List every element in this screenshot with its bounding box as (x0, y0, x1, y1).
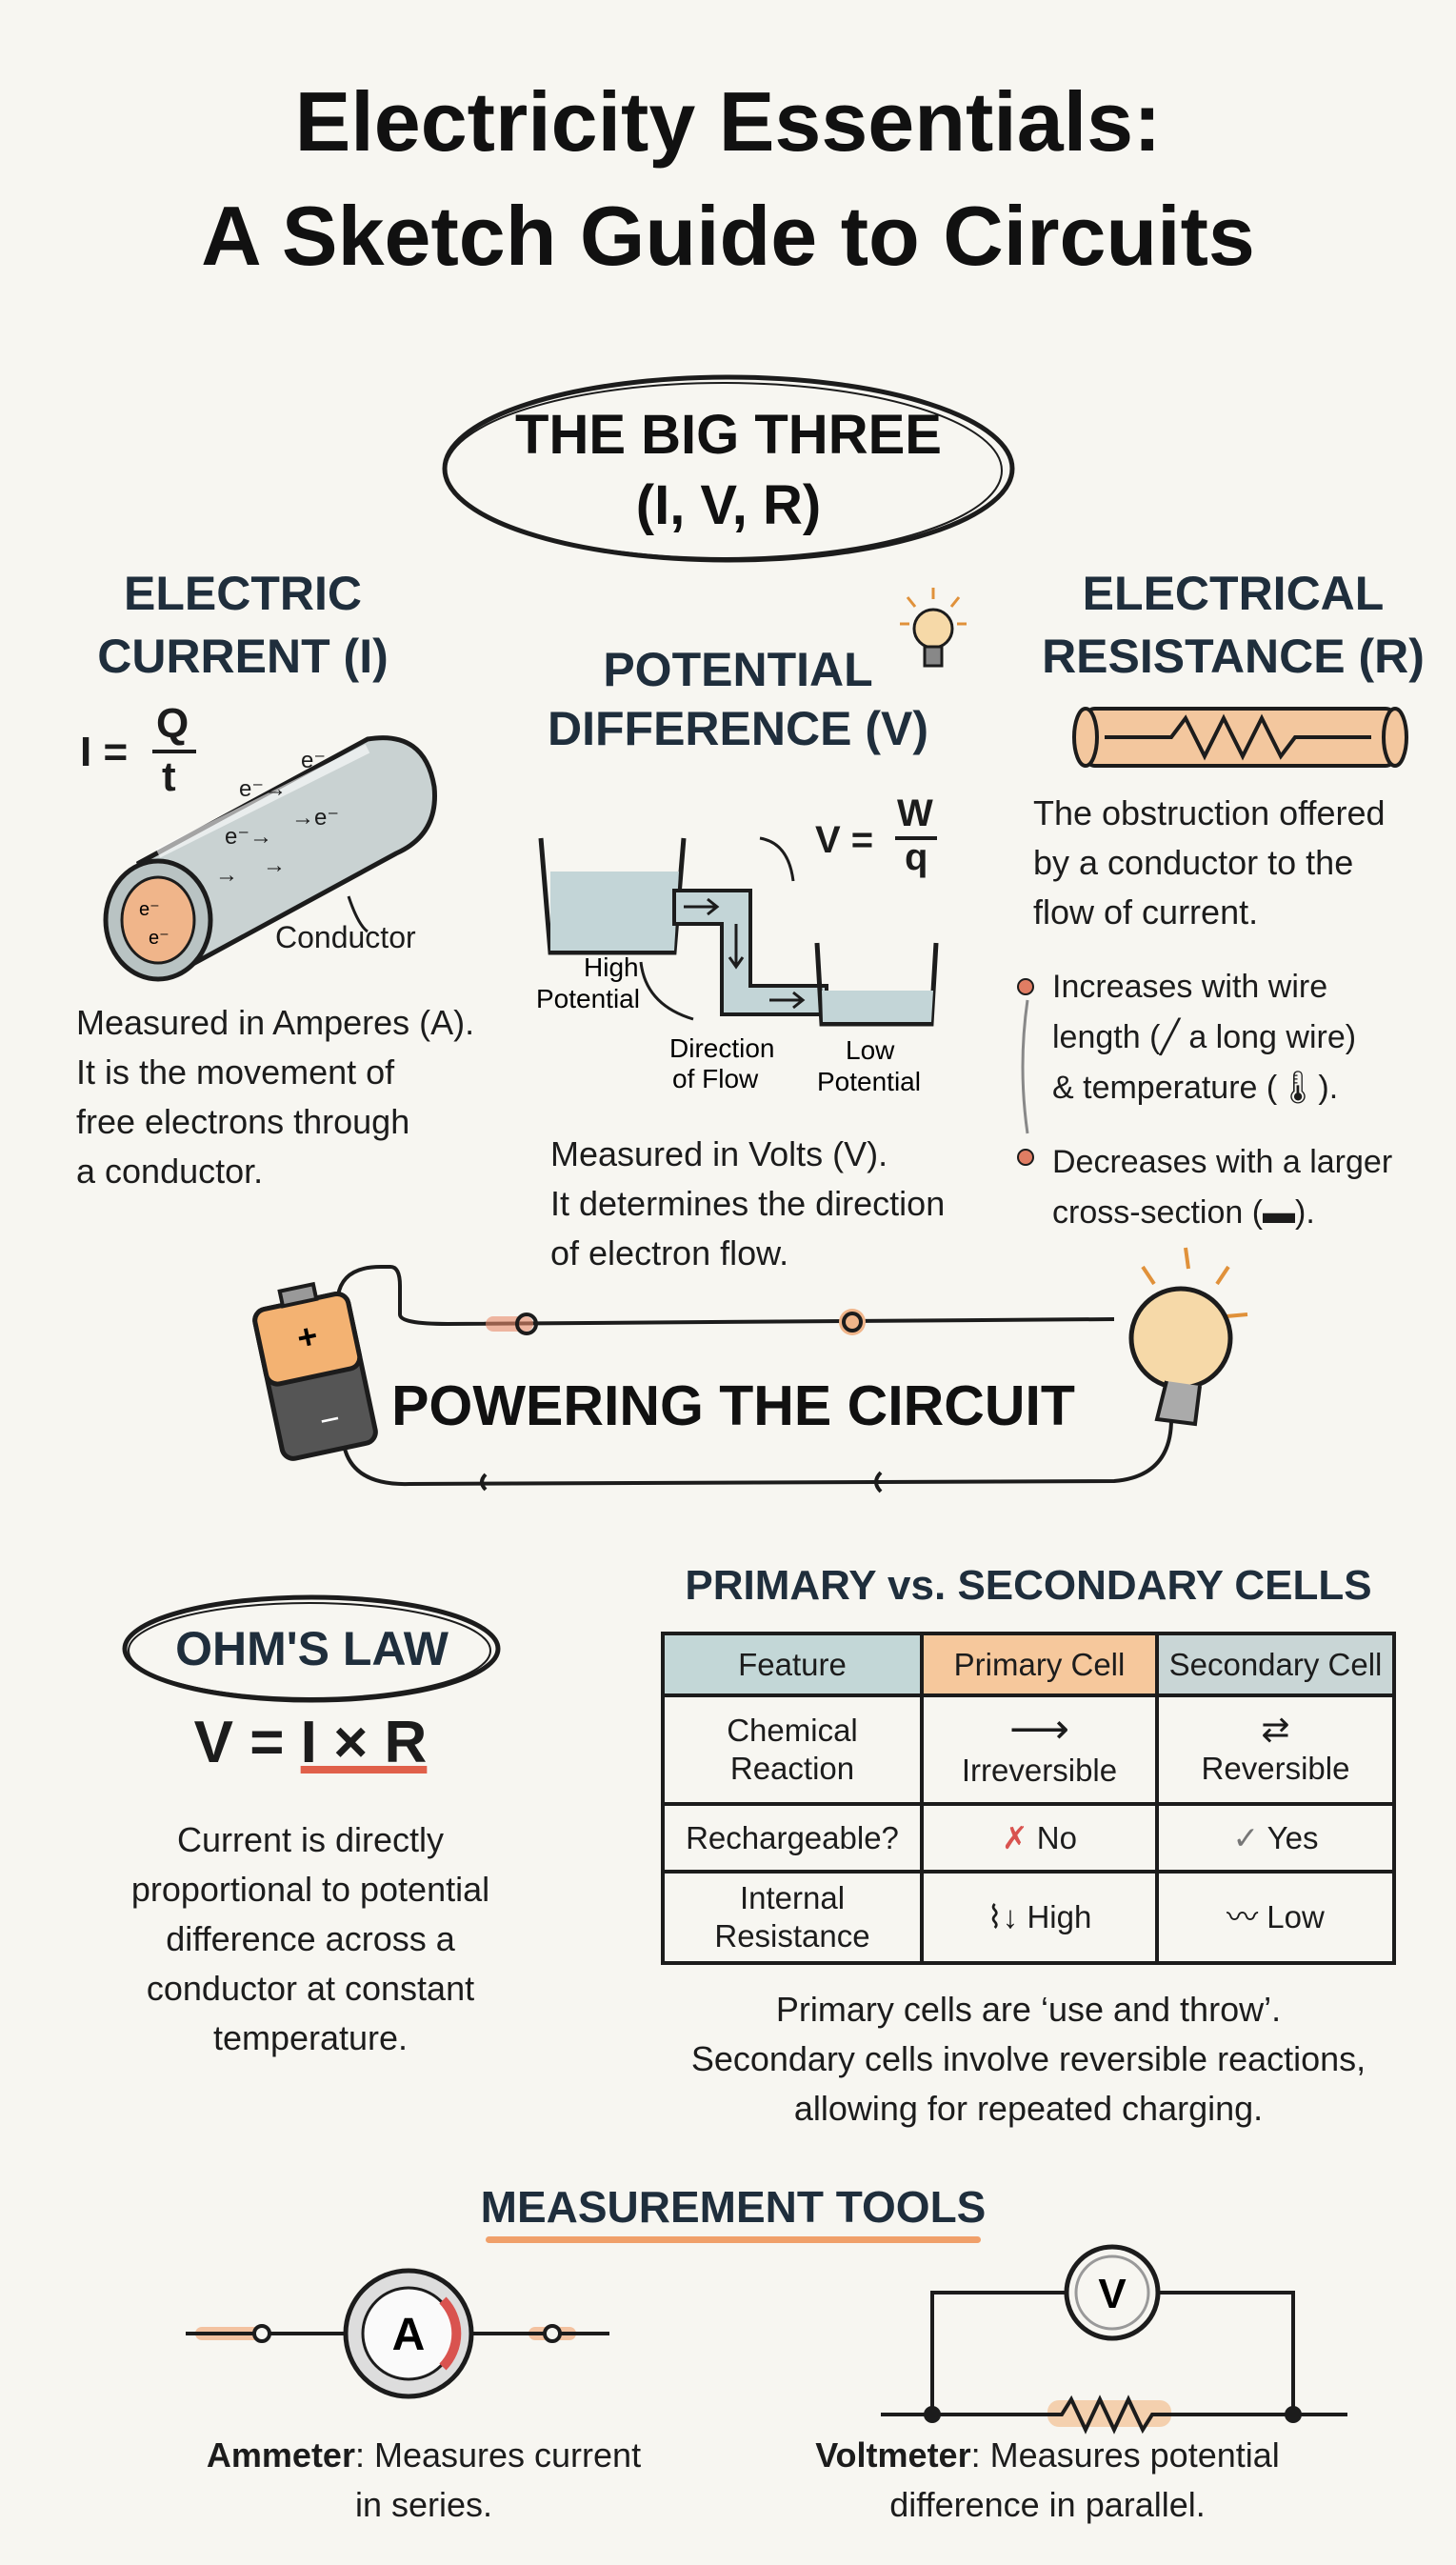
text: resistance description: The obstruction offered (1033, 793, 1386, 832)
table: cell comparison: 〰 Low (1227, 1899, 1325, 1934)
text: ohm's law description: difference across a (166, 1919, 455, 1958)
list: resistance factors: Increases with wire (1052, 969, 1327, 1005)
text: voltmeter caption (815, 2435, 1280, 2524)
formula I=Q/t: t (162, 753, 176, 800)
text: current description: It is the movement of (76, 1052, 394, 1092)
text: ammeter caption: Ammeter: Measures current (207, 2435, 641, 2475)
text: current description: Measured in Amperes (A). (76, 1003, 474, 1042)
icon: ammeter: A (392, 2310, 425, 2360)
text: potential difference description: Measured in Volts (V). (550, 1134, 888, 1173)
circuit: powering the circuit: + (293, 1315, 321, 1357)
formula I=Q/t: I = (80, 729, 128, 775)
illustration: water tanks: Direction (669, 1033, 774, 1063)
text: resistance description: flow of current. (1033, 892, 1258, 932)
table: cell comparison: Resistance (714, 1918, 870, 1954)
text: cells caption (691, 1990, 1366, 2128)
title: Electricity Essentials: (295, 74, 1161, 169)
text: resistance description: by a conductor to the (1033, 843, 1353, 882)
icon: voltmeter: V (1098, 2271, 1127, 2317)
text: ammeter caption: in series. (355, 2485, 492, 2524)
list: resistance factors: Decreases with a larger (1052, 1144, 1392, 1180)
table: cell comparison: ⟶ (1009, 1705, 1069, 1753)
heading: primary vs secondary: PRIMARY vs. SECONDARY CELLS (685, 1562, 1372, 1609)
circuit: powering the circuit: − (316, 1398, 344, 1440)
label: conductor: Conductor (275, 920, 416, 954)
formula I=Q/t: Q (156, 700, 189, 747)
heading: powering the circuit: POWERING THE CIRCUIT (391, 1374, 1075, 1437)
text: ohm's law description: Current is directly (177, 1820, 444, 1859)
illustration: water tanks: Low (846, 1035, 895, 1065)
table: cell comparison: Reversible (1202, 1751, 1349, 1786)
list: resistance factors: cross-section (▬). (1052, 1194, 1315, 1231)
illustration: water tanks (536, 836, 939, 1096)
text: resistance description (1033, 793, 1386, 932)
illustration: water tanks: of Flow (672, 1064, 759, 1093)
table: cell comparison: Internal (740, 1880, 845, 1915)
table: cell comparison: Reaction (730, 1751, 854, 1786)
illustration: conductor wire with electrons: → (215, 862, 238, 888)
heading: the big three: (I, V, R) (636, 474, 821, 536)
text: ohm's law description: proportional to potential (131, 1870, 489, 1909)
illustration: conductor wire with electrons: e⁻ (149, 928, 170, 949)
illustration: conductor wire with electrons: →e⁻ (291, 805, 339, 831)
text: voltmeter caption: Voltmeter: Measures potential (815, 2435, 1280, 2475)
text: cells caption: allowing for repeated charging. (794, 2089, 1263, 2128)
list: resistance factors: length (╱ a long wire) (1052, 1019, 1356, 1055)
text: potential difference description (550, 1134, 945, 1272)
title (201, 74, 1255, 283)
heading: electric current: ELECTRIC (124, 567, 362, 620)
table: cell comparison: Primary Cell (954, 1646, 1125, 1682)
heading: potential difference: DIFFERENCE (V) (548, 702, 928, 755)
list: resistance factors (1017, 969, 1392, 1231)
icon: resistor tube (1072, 707, 1408, 768)
formula V=W/q: W (897, 792, 933, 834)
heading: potential difference (548, 643, 928, 755)
text: current description: free electrons through (76, 1102, 409, 1141)
text: cells caption: Primary cells are ‘use and throw’. (776, 1990, 1281, 2029)
heading: potential difference: POTENTIAL (603, 643, 873, 696)
table: cell comparison: Irreversible (962, 1753, 1117, 1787)
list: resistance factors: & temperature (🌡). (1052, 1070, 1338, 1106)
text: potential difference description: of electron flow. (550, 1233, 788, 1272)
illustration: water tanks: Potential (536, 984, 640, 1013)
text: voltmeter caption: difference in parallel. (889, 2485, 1206, 2524)
heading: electrical resistance: RESISTANCE (R) (1042, 630, 1425, 683)
heading: ohm's law (122, 1594, 501, 1703)
text: cells caption: Secondary cells involve reversible reactions, (691, 2039, 1366, 2078)
text: ohm's law description: temperature. (213, 2018, 408, 2057)
heading: electric current (97, 567, 389, 683)
table: cell comparison: Chemical (727, 1713, 858, 1748)
text: current description (76, 1003, 474, 1191)
icon: ammeter (186, 2269, 609, 2398)
table: cell comparison: Rechargeable? (686, 1819, 899, 1855)
heading: electrical resistance: ELECTRICAL (1083, 567, 1384, 620)
table: cell comparison: ⇄ (1261, 1710, 1290, 1749)
heading: the big three: THE BIG THREE (515, 404, 942, 466)
table: cell comparison: ✗ No (1002, 1819, 1077, 1855)
table: cell comparison: Feature (738, 1646, 847, 1682)
formula V=W/q (815, 792, 937, 878)
text: ohm's law description: conductor at constant (147, 1969, 474, 2008)
title: A Sketch Guide to Circuits (201, 189, 1255, 283)
illustration: conductor wire with electrons: e⁻ (139, 899, 160, 920)
text: ohm's law description (131, 1820, 489, 2057)
heading: electric current: CURRENT (I) (97, 630, 389, 683)
illustration: water tanks: High (584, 952, 639, 982)
text: ammeter caption (207, 2435, 641, 2524)
table: cell comparison (661, 1632, 1396, 1965)
heading: electrical resistance (1042, 567, 1425, 683)
illustration: conductor wire with electrons: → (263, 852, 286, 878)
text: potential difference description: It determines the direction (550, 1184, 945, 1223)
formula V=W/q: q (905, 836, 927, 878)
table: cell comparison: ✓ Yes (1232, 1819, 1319, 1855)
illustration: conductor wire with electrons (103, 735, 437, 981)
text: current description: a conductor. (76, 1152, 263, 1191)
heading: ohm's law: OHM'S LAW (175, 1622, 449, 1675)
formula I=Q/t (80, 700, 196, 800)
illustration: conductor wire with electrons: e⁻→ (239, 776, 287, 802)
table: cell comparison: ⌇↓ High (987, 1899, 1091, 1934)
illustration: water tanks: Potential (817, 1067, 921, 1096)
icon: small bulb (900, 588, 967, 667)
illustration: conductor wire with electrons: e⁻→ (225, 824, 272, 850)
icon: voltmeter (881, 2244, 1347, 2435)
illustration: conductor wire with electrons: e⁻ (301, 748, 326, 773)
formula: V = I x R: V = I × R (194, 1710, 427, 1775)
heading: measurement tools: MEASUREMENT TOOLS (481, 2182, 986, 2232)
heading: the big three (442, 375, 1015, 562)
circuit: powering the circuit (252, 1248, 1247, 1493)
formula V=W/q: V = (815, 819, 873, 861)
table: cell comparison: Secondary Cell (1169, 1646, 1382, 1682)
